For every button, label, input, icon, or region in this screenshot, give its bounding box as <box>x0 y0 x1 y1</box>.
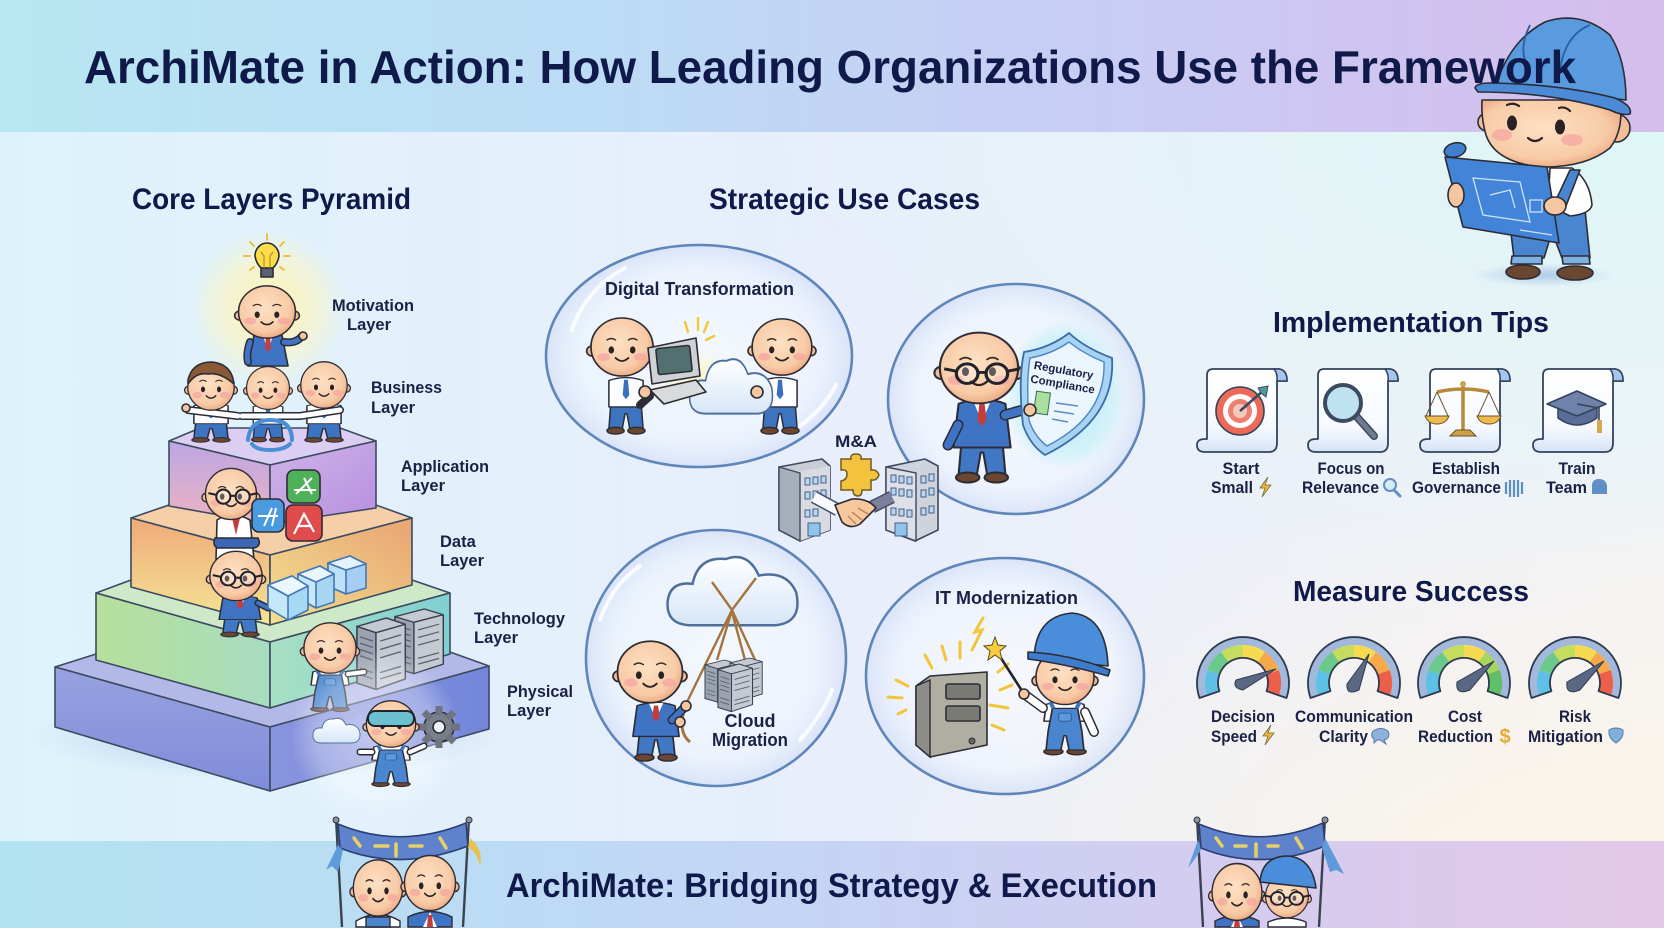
needle <box>1235 669 1276 690</box>
label: physical: Physical <box>507 683 573 701</box>
footer left figures with banner <box>326 817 481 927</box>
layer labels <box>332 297 573 720</box>
icon: bolt <box>1263 725 1274 745</box>
data cubes <box>268 556 366 620</box>
icon: cloud <box>668 557 797 625</box>
label: data second line: Layer <box>440 552 485 570</box>
technology figure and servers <box>300 609 443 712</box>
mascot: engineer with blueprint <box>1443 18 1630 287</box>
tip: focus on relevance <box>1302 369 1400 497</box>
label: reduction: Reduction <box>1418 727 1493 746</box>
application tier <box>169 428 376 524</box>
label: team: Team <box>1546 478 1587 497</box>
building right <box>886 459 938 541</box>
label: relevance: Relevance <box>1302 478 1379 497</box>
data tier <box>131 505 412 625</box>
heading: measure success: Measure Success <box>1293 576 1529 608</box>
gauge: cost reduction <box>1418 637 1511 748</box>
icon: target <box>1216 386 1268 435</box>
icon: shield <box>1609 728 1623 743</box>
label: establish: Establish <box>1432 459 1500 478</box>
label: application second line: Layer <box>401 477 446 495</box>
label: governance: Governance <box>1412 478 1501 497</box>
icon: shield with text <box>1021 333 1112 455</box>
heading: core layers pyramid: Core Layers Pyramid <box>132 183 411 216</box>
label: motivation: Motivation <box>332 297 414 315</box>
magic wand <box>999 655 1024 694</box>
icon: shield with text: Compliance <box>1029 373 1096 397</box>
label: cost: Cost <box>1448 707 1482 726</box>
header band <box>0 0 1664 132</box>
icon: puzzle piece <box>841 454 879 496</box>
needle <box>1567 661 1604 692</box>
M&A label: M&A <box>835 432 877 451</box>
icon: columns <box>1506 480 1522 497</box>
icon: shield with text: Regulatory <box>1033 360 1095 382</box>
icon: handshake <box>814 497 892 527</box>
label: application: Application <box>401 458 489 476</box>
bubble: cloud migration <box>586 530 846 786</box>
pyramid <box>30 428 500 791</box>
footer right figures with banner <box>1188 817 1344 927</box>
icon: gear <box>418 706 460 748</box>
icon: dollar: $ <box>1499 726 1511 748</box>
label: small: Small <box>1211 478 1253 497</box>
footer band <box>0 841 1664 928</box>
label: communication: Communication <box>1295 707 1413 726</box>
label: cloud: Cloud <box>724 711 776 731</box>
needle <box>1457 661 1494 692</box>
icon: light bulb <box>244 234 290 277</box>
physical tier <box>55 652 489 791</box>
gauge: decision speed <box>1197 637 1289 746</box>
label: data: Data <box>440 533 477 551</box>
icon: speech bubbles <box>1372 728 1389 744</box>
app tiles <box>252 470 322 541</box>
M&A group <box>779 432 938 541</box>
label: decision: Decision <box>1211 707 1275 726</box>
heading: implementation tips: Implementation Tips <box>1273 307 1549 339</box>
bubble: digital transformation <box>546 245 852 467</box>
ropes and server rack <box>682 578 762 742</box>
icon: magnifier <box>1325 385 1374 436</box>
footer text: ArchiMate: Bridging Strategy & Execution <box>506 867 1157 905</box>
label: mitigation: Mitigation <box>1528 727 1603 746</box>
data figure and cubes <box>206 551 366 637</box>
tip: start small <box>1197 369 1287 497</box>
gauge: communication clarity <box>1295 637 1413 746</box>
bubble title: IT Modernization <box>935 588 1078 608</box>
technology tier <box>96 580 450 708</box>
icon: bolt <box>1260 477 1271 497</box>
label: speed: Speed <box>1211 727 1257 746</box>
icon: scales <box>1425 381 1501 436</box>
application figure and app tiles <box>202 468 322 560</box>
motivation figure with bulb <box>190 230 346 386</box>
label: motivation second line: Layer <box>347 316 392 334</box>
label: technology second line: Layer <box>474 629 519 647</box>
bubble: regulatory compliance <box>888 284 1144 514</box>
icon: mini magnifier <box>1384 479 1400 496</box>
tip: train team <box>1533 369 1623 497</box>
spark rays <box>888 618 1012 730</box>
icon: mini team <box>1592 479 1607 494</box>
label: train: Train <box>1558 459 1596 478</box>
building left <box>779 459 830 541</box>
tip: establish governance <box>1412 369 1522 497</box>
physical figure with goggles, cloud, gear <box>290 650 460 820</box>
icon: circular arrows <box>248 420 292 450</box>
label: technology: Technology <box>474 610 566 628</box>
label: business: Business <box>371 379 442 397</box>
gauge: risk mitigation <box>1528 637 1623 746</box>
label: physical second line: Layer <box>507 702 552 720</box>
label: risk: Risk <box>1559 707 1591 726</box>
old computer <box>916 672 987 757</box>
title: ArchiMate in Action: How Leading Organizations Use the Framework <box>84 41 1576 93</box>
label: focus on: Focus on <box>1318 459 1384 478</box>
icon: graduation cap <box>1547 391 1606 433</box>
label: start: Start <box>1222 459 1260 478</box>
label: migration: Migration <box>712 730 788 750</box>
business figures <box>182 362 350 450</box>
label: clarity: Clarity <box>1319 727 1368 746</box>
heading: strategic use cases: Strategic Use Cases <box>709 183 980 216</box>
bubble title: Digital Transformation <box>605 279 794 299</box>
bubble: IT modernization <box>866 558 1144 794</box>
needle <box>1347 654 1369 692</box>
label: business second line: Layer <box>371 399 416 417</box>
